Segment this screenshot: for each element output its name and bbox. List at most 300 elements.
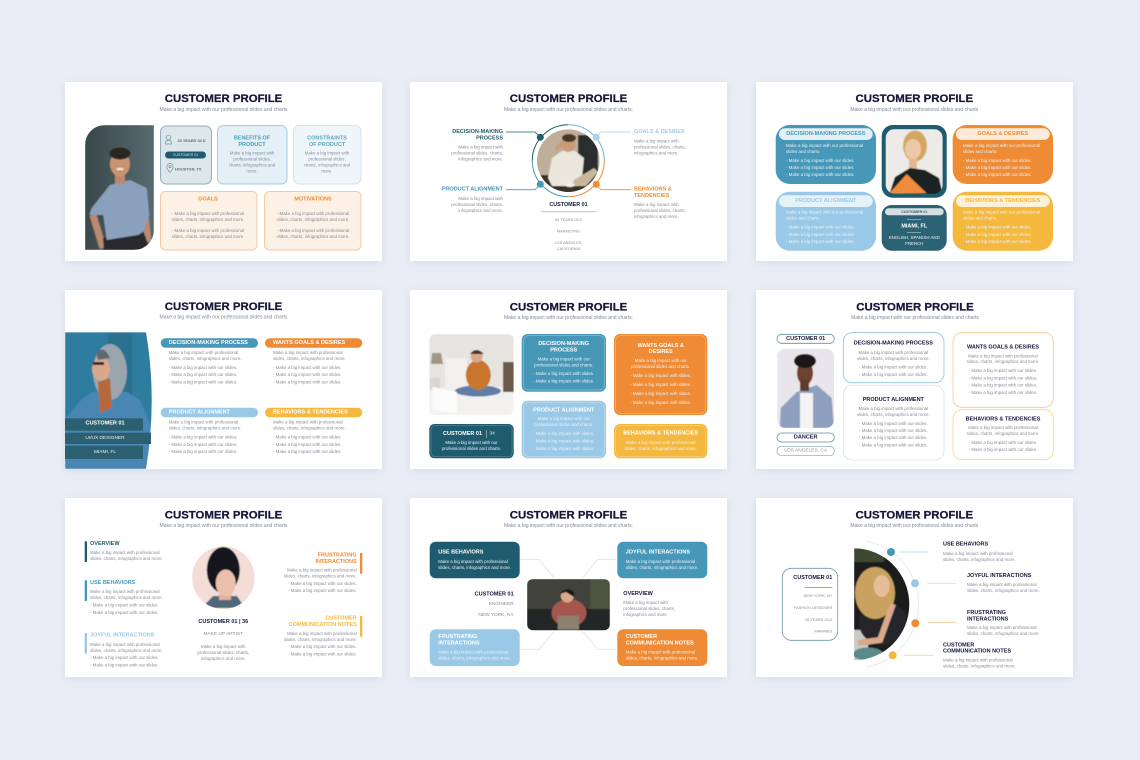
title: CUSTOMER PROFILE [510,510,628,522]
text: decision-making process: infographics and more. [458,156,503,162]
customer details: professional slides, charts, [197,650,249,655]
customer details: infographics and more. [201,656,246,661]
customer details: MAKE UP ARTIST [204,631,243,637]
card: goals and desires: - Make a big impact with our slides. [963,158,1032,163]
card: decision-making process: - Make a big impact with our slides. [859,372,928,377]
photo: young man [777,348,835,429]
card: behaviors and tendencies: - Make a big impact with our slides. [963,239,1032,244]
arc [867,541,919,667]
block: behaviors and tendencies: - Make a big impact with our slides. [273,434,342,440]
occupation pill [777,433,834,442]
card: frustrating interactions [430,629,520,666]
photo: engineer with laptop [527,579,610,631]
name bars: CUSTOMER 01 [85,420,125,426]
card: customer summary: Make a big impact with our [445,440,498,445]
block: customer communication notes: - Make a big impact with our slides. [288,652,357,656]
block: decision-making process: DECISION-MAKING PROCESS [169,340,248,346]
card: wants goals and desires: - Make a big impact with slides. [630,391,691,396]
card: frustrating interactions: INTERACTIONS [438,640,480,646]
block: customer communication notes [284,616,362,656]
block: customer communication notes: CUSTOMER [943,642,974,648]
panel: slide 9 half-circle photo timeline [756,498,1073,677]
block: customer communication notes: COMMUNICATION NOTES [943,649,1011,655]
card: customer communication notes: Make a big impact with professional [626,650,695,654]
card: constraints of product [294,126,361,184]
text: goals and desires: GOALS & DESIRES [634,129,685,135]
text: product alignment: professional slides, charts, [451,202,503,207]
card: joyful interactions: JOYFUL INTERACTIONS [626,550,690,556]
block: frustrating interactions [967,610,1040,636]
card: decision-making process: DECISION-MAKING [538,341,589,347]
card: product alignment: - Make a big impact with slides. [533,446,594,451]
text: product alignment: infographics and more. [458,208,503,213]
card: product alignment [522,401,606,458]
block: customer communication notes: slides, charts, infographics and more. [284,637,357,642]
card: goals: GOALS [198,196,218,202]
card: use behaviors: USE BEHAVIORS [438,550,484,556]
card: wants goals and desires: - Make a big impact with slides. [630,373,691,378]
age label: 25 YEARS OLD [178,138,206,143]
subtitle: Make a big impact with our professional slides and charts [160,523,288,529]
card: customer summary: CUSTOMER 01 [443,431,482,437]
title: CUSTOMER PROFILE [510,302,628,314]
subtitle: Make a big impact with our professional slides and charts. [504,315,633,321]
subtitle: Make a big impact with our professional slides and charts. [504,523,633,529]
customer details: Make a big impact with [201,644,246,649]
card: behaviors and tendencies: - Make a big impact with our slides. [969,440,1037,445]
customer details: ENGINEER [489,601,514,607]
card: goals [160,192,257,250]
card: goals and desires: GOALS & DESIRES [977,131,1028,137]
block: wants goals and desires: - Make a big impact with our slides. [273,365,342,370]
card: behaviors and tendencies: Make a big impact with professional [626,440,695,445]
block: behaviors and tendencies: - Make a big impact with our slides. [273,442,342,447]
card: customer location and languages: MIAMI, FL [901,223,928,229]
location label: HOUSTON, TX [175,166,202,172]
block: use behaviors: Make a big impact with professional [943,551,1013,556]
card: customer communication notes: CUSTOMER [626,634,657,640]
card: benefits of product: Make a big impact with [230,150,275,156]
card: behaviors and tendencies: slides, charts, infographics and more. [624,446,697,451]
card: behaviors and tendencies: Make a big impact with our professional [963,210,1040,214]
customer pill: CUSTOMER 01 [173,153,198,157]
card: joyful interactions: Make a big impact with professional [626,559,695,564]
block: customer communication notes: Make a big impact with professional [943,658,1013,662]
block: behaviors and tendencies: BEHAVIORS & TENDENCIES [273,410,348,416]
card: product alignment: slides, charts, infographics and more. [857,412,930,417]
panel: slide 4 side photo with pill headings [65,290,382,469]
customer details [541,202,596,251]
card: use behaviors: slides, charts, infographics and more. [438,565,511,570]
block: wants goals and desires: slides, charts, infographics and more. [273,356,346,361]
card: behaviors and tendencies [953,410,1053,460]
card: wants goals and desires: DESIRES [649,349,673,355]
card: motivations: slides, charts, infographics and more. [277,217,349,222]
block: overview: infographics and more. [623,612,668,617]
card: frustrating interactions: Make a big impact with professional [438,650,508,654]
card: goals: - Make a big impact with professional [172,211,244,216]
title: CUSTOMER PROFILE [856,302,974,314]
card: customer location and languages: CUSTOMER 01 [901,210,927,214]
card: product alignment: - Make a big impact with our slides. [859,435,928,440]
card: wants goals and desires: slides, charts, infographics and more. [967,359,1039,364]
card: wants goals and desires: WANTS GOALS & DESIRES [967,344,1039,350]
text: behaviors and tendencies [634,187,686,219]
block: frustrating interactions: Make a big impact with professional [287,568,357,572]
text: behaviors and tendencies: Make a big impact with [634,202,679,207]
block: frustrating interactions: slides, charts, infographics and more. [284,574,357,578]
block: frustrating interactions: INTERACTIONS [967,616,1009,622]
block: frustrating interactions: - Make a big impact with our slides. [288,581,357,586]
card: frustrating interactions: FRUSTRATING [438,634,477,640]
card: wants goals and desires [953,333,1053,407]
card: benefits of product: professional slides, [233,156,271,162]
card: product alignment: Make a big impact with our professional [786,210,863,214]
block: decision-making process: slides, charts, infographics and more. [169,356,241,361]
card: product alignment: - Make a big impact with our slides. [859,428,928,433]
card: decision-making process [776,125,876,184]
title: CUSTOMER PROFILE [856,93,973,105]
card: product alignment: PRODUCT ALIGNMENT [863,397,925,403]
card: benefits of product: PRODUCT [238,142,266,148]
card: decision-making process: slides and charts. [786,149,820,154]
card: decision-making process: professional slides and charts. [534,362,593,368]
card: motivations: MOTIVATIONS [294,196,332,202]
card: product alignment: slides and charts. [786,216,820,220]
card: goals and desires: - Make a big impact with our slides. [963,172,1032,177]
card: product alignment [776,192,876,251]
card: behaviors and tendencies: BEHAVIORS & TENDENCIES [965,198,1041,204]
block: product alignment: - Make a big impact with our slides. [169,434,237,440]
card: decision-making process [522,334,606,392]
block: customer communication notes: CUSTOMER [325,616,357,622]
card: wants goals and desires: - Make a big impact with our slides. [969,368,1037,373]
card: constraints of product: professional slides, [308,156,346,162]
text: product alignment: PRODUCT ALIGNMENT [442,187,504,193]
block: decision-making process: - Make a big impact with our slides. [169,372,237,377]
icon: person [166,135,172,144]
subtitle: Make a big impact with our professional slides and charts [160,107,288,113]
card: customer summary: 34 [490,430,495,436]
block: wants goals and desires [265,338,362,384]
card: behaviors and tendencies [953,192,1053,251]
card: decision-making process: - Make a big impact with our slides. [786,158,855,163]
subtitle: Make a big impact with our professional slides and charts [850,107,979,113]
block: overview [85,541,163,562]
block: wants goals and desires: - Make a big impact with our slides. [273,380,342,384]
block: behaviors and tendencies: Make a big impact with professional [273,420,343,424]
card: benefits of product: more. [246,168,258,174]
name bars: UI/UX DESIGNER [85,435,125,441]
card: goals and desires: Make a big impact with our professional [963,143,1040,148]
panel: slide 8 mind-map layout [410,498,727,677]
panel: slide 7 centre portrait with side bars [65,498,382,677]
block: overview [623,591,675,617]
customer details: 34 YEARS OLD [555,217,582,222]
card: decision-making process: slides, charts, infographics and more. [857,356,930,361]
text: decision-making process: professional slides, charts, [451,150,503,156]
customer details: NEW YORK, NY [478,612,514,618]
card: product alignment: professional slides and charts. [534,422,593,427]
card: customer summary [429,424,514,458]
card: motivations: - Make a big impact with professional [277,211,349,216]
photo card: blonde woman [882,125,947,198]
block: frustrating interactions: INTERACTIONS [315,559,357,565]
block: use behaviors: Make a big impact with professional [90,589,160,594]
card: benefits of product: charts, infographics and [229,162,276,168]
card: customer location and languages: FRENCH [905,241,923,246]
text: behaviors and tendencies: professional slides, charts, [634,208,686,213]
card: wants goals and desires: - Make a big impact with our slides. [969,390,1037,395]
card: motivations [264,192,361,250]
text: goals and desires: infographics and more. [634,150,679,156]
text: decision-making process: DECISION-MAKING [452,129,503,135]
card: behaviors and tendencies: Make a big impact with professional [968,425,1038,430]
card: goals and desires [953,125,1053,184]
panel: slide 3 filled rounded cards [756,82,1073,261]
block: joyful interactions: - Make a big impact with our slides. [90,655,159,660]
card: wants goals and desires: - Make a big impact with our slides. [969,376,1037,380]
card: decision-making process: Make a big impact with our [538,356,590,362]
subtitle: Make a big impact with our professional slides and charts [160,315,288,321]
card: customer details: 28 YEARS OLD [805,617,832,622]
card: goals and desires: slides and charts. [963,149,997,154]
block: product alignment: PRODUCT ALIGNMENT [169,410,231,416]
block: overview: OVERVIEW [90,541,120,547]
block: use behaviors: USE BEHAVIORS [90,580,135,586]
block: use behaviors [85,580,163,615]
block: overview: OVERVIEW [623,591,654,597]
card: decision-making process: DECISION-MAKING PROCESS [786,131,866,137]
photo: blonde woman [853,548,910,661]
block: overview: Make a big impact with [623,600,669,605]
card: constraints of product: more. [321,168,333,174]
photo: woman on bed with laptop [429,334,514,415]
card: wants goals and desires: WANTS GOALS & [637,343,684,349]
title: CUSTOMER PROFILE [510,93,628,105]
card: frustrating interactions: slides, charts, infographics and more. [438,656,511,660]
block: frustrating interactions: FRUSTRATING [318,553,357,559]
card: constraints of product: Make a big impact with [305,150,350,156]
title: CUSTOMER PROFILE [165,93,283,105]
text: decision-making process: PROCESS [476,136,503,142]
card: product alignment: - Make a big impact with our slides. [859,421,928,426]
block: overview: professional slides, charts, [623,606,675,611]
block: use behaviors: slides, charts, infographics and more. [943,557,1016,562]
block: decision-making process: - Make a big impact with our slides. [169,365,237,370]
block: frustrating interactions [284,553,362,593]
text: behaviors and tendencies: TENDENCIES [634,193,670,199]
block: use behaviors: USE BEHAVIORS [943,542,988,548]
customer details: CALIFORNIA [557,246,581,251]
block: product alignment: Make a big impact with professional [169,420,238,424]
text: decision-making process [451,129,504,162]
card: customer details [782,568,838,640]
block: frustrating interactions: - Make a big impact with our slides. [288,588,357,593]
card: product alignment: PRODUCT ALIGNMENT [795,198,857,204]
card: behaviors and tendencies: slides, charts, infographics and more. [967,431,1039,436]
block: product alignment: - Make a big impact with our slides. [169,442,237,447]
card: decision-making process: Make a big impact with our professional [786,143,863,148]
customer details [475,591,514,618]
card: constraints of product: charts, infographics and [304,162,351,168]
card: use behaviors [430,542,520,578]
block: overview: Make a big impact with professional [90,550,160,555]
customer details: LOS ANGELES, [554,240,583,245]
text: goals and desires: professional slides, charts, [634,144,686,150]
title: CUSTOMER PROFILE [165,510,283,522]
customer details [197,619,249,661]
card: decision-making process: DECISION-MAKING PROCESS [854,341,933,347]
block: customer communication notes [943,642,1016,668]
text: product alignment: Make a big impact with [458,196,504,201]
block: joyful interactions [967,573,1040,593]
card: constraints of product: OF PRODUCT [309,142,346,148]
card: product alignment: - Make a big impact with slides. [533,431,594,436]
card: decision-making process: - Make a big impact with our slides. [786,172,855,177]
block: joyful interactions: slides, charts, infographics and more. [90,648,163,653]
card: joyful interactions: slides, charts, infographics and more. [626,565,698,570]
location pill: LOS ANGELES, CA [784,448,828,454]
card: decision-making process: Make a big impact with professional [859,350,928,355]
customer details: CUSTOMER 01 [549,202,588,208]
block: joyful interactions [85,633,163,668]
subtitle: Make a big impact with our professional slides and charts [851,315,979,321]
card: behaviors and tendencies [614,424,707,458]
panel: slide 5 tile grid [410,290,727,469]
card: goals: - Make a big impact with professional [172,228,244,233]
block: frustrating interactions: FRUSTRATING [967,610,1006,616]
customer details: CUSTOMER 01 | 36 [198,619,248,625]
card: customer summary: professional slides and charts. [442,446,501,451]
card: use behaviors: Make a big impact with professional [438,559,508,564]
card: wants goals and desires [614,334,707,415]
photo: make-up artist [192,546,255,609]
connector lines [900,552,956,655]
card: product alignment: - Make a big impact with our slides. [859,442,928,448]
block: use behaviors: slides, charts, infographics and more. [90,595,163,600]
card: behaviors and tendencies: slides and charts. [963,216,997,220]
customer name pill [777,334,834,343]
location pill [777,446,834,456]
card: goals and desires: - Make a big impact with our slides. [963,165,1032,170]
photo: woman in hoodie [65,332,157,469]
card: decision-making process: PROCESS [550,347,577,353]
block: customer communication notes: COMMUNICATION NOTES [289,622,357,628]
block: joyful interactions: Make a big impact with professional [90,642,160,647]
card: goals: slides, charts, infographics and more. [172,217,244,222]
block: customer communication notes: - Make a big impact with our slides. [288,644,357,649]
card: decision-making process: - Make a big impact with slides. [533,371,594,376]
icon: location pin [167,164,173,172]
card: benefits of product [218,126,287,184]
card: wants goals and desires: - Make a big impact with slides. [630,400,691,405]
block: joyful interactions: slides, charts, infographics and more. [967,588,1040,593]
marker dots [537,134,600,188]
card: product alignment: - Make a big impact with slides. [533,438,594,444]
block: product alignment: slides, charts, infographics and more. [169,426,241,430]
card: motivations: slides, charts, infographics and more. [277,234,349,239]
card: behaviors and tendencies: - Make a big impact with our slides. [963,232,1032,237]
customer name pill: CUSTOMER 01 [786,336,825,342]
block: joyful interactions: JOYFUL INTERACTIONS [967,573,1032,579]
block: customer communication notes: Make a big impact with professional [287,631,357,636]
block: behaviors and tendencies: slides, charts, infographics and more. [273,426,346,430]
block: decision-making process [161,338,258,384]
subtitle: Make a big impact with our professional slides and charts. [504,107,633,113]
title: CUSTOMER PROFILE [856,510,973,522]
card: motivations: - Make a big impact with professional [277,228,349,233]
text: product alignment [442,187,504,213]
text: goals and desires: Make a big impact with [634,138,679,144]
card: wants goals and desires: - Make a big impact with slides. [630,382,691,387]
card: customer location and languages [882,205,947,251]
subtitle: Make a big impact with our professional slides and charts [850,523,979,529]
card: product alignment: Make a big impact with professional [859,406,928,411]
panel: slide 1 persona with benefit cards [65,82,382,261]
block: product alignment [161,408,258,454]
card: wants goals and desires: Make a big impact with our [635,358,687,363]
block: frustrating interactions: Make a big impact with professional [967,625,1037,630]
block: decision-making process: Make a big impact with professional [169,350,238,355]
card: behaviors and tendencies: BEHAVIORS & TENDENCIES [623,431,698,437]
card: joyful interactions [617,542,707,578]
card: wants goals and desires: Make a big impact with professional [968,354,1038,358]
card: decision-making process: - Make a big impact with our slides. [786,165,855,170]
block: product alignment: - Make a big impact with our slides. [169,449,237,454]
card: product alignment: Make a big impact with our [538,416,590,421]
block: use behaviors [943,542,1016,562]
ring with coloured segments [532,125,604,197]
customer details: CUSTOMER 01 [475,591,514,597]
card: product alignment: - Make a big impact with our slides. [786,224,855,230]
customer details: MARKETING [557,228,580,234]
text: behaviors and tendencies: infographics and more. [634,214,679,219]
block: frustrating interactions: slides, charts, infographics and more. [967,631,1040,636]
card: product alignment: - Make a big impact with our slides. [786,232,855,237]
card: wants goals and desires: professional slides and charts. [631,364,690,369]
card: constraints of product: CONSTRAINTS [307,136,347,142]
block: joyful interactions: Make a big impact with professional [967,582,1037,587]
card: behaviors and tendencies: - Make a big impact with our slides. [969,447,1037,452]
card: customer communication notes [617,629,707,666]
block: wants goals and desires: WANTS GOALS & DESIRES [273,340,345,346]
block: behaviors and tendencies [265,408,362,454]
block: decision-making process: - Make a big impact with our slides. [169,380,237,384]
block: use behaviors: - Make a big impact with our slides. [90,602,159,608]
photo: man on phone [536,129,600,195]
card: decision-making process: - Make a big impact with our slides. [859,364,928,370]
panel: slide 6 outlined cards [756,290,1074,469]
card: product alignment [843,385,944,460]
card: behaviors and tendencies: - Make a big impact with our slides. [963,224,1032,230]
card: customer location and languages: ENGLISH, SPANISH AND [889,235,940,240]
block: joyful interactions: - Make a big impact with our slides. [90,662,159,668]
card: customer details [160,126,212,184]
card: decision-making process [843,333,944,383]
card: product alignment: - Make a big impact with our slides. [786,239,855,244]
name bars: MIAMI, FL [94,449,116,455]
card: customer details: CUSTOMER 01 [793,575,832,581]
title: CUSTOMER PROFILE [165,301,283,313]
block: behaviors and tendencies: - Make a big impact with our slides. [273,449,342,454]
marker dots [887,548,919,659]
text: behaviors and tendencies: BEHAVIORS & [634,187,672,193]
card: customer details: MARRIED [814,628,832,634]
occupation pill: DANCER [794,434,817,440]
text: decision-making process: Make a big impact with [458,144,504,150]
card: customer details: FASHION DESIGNER [794,605,832,610]
